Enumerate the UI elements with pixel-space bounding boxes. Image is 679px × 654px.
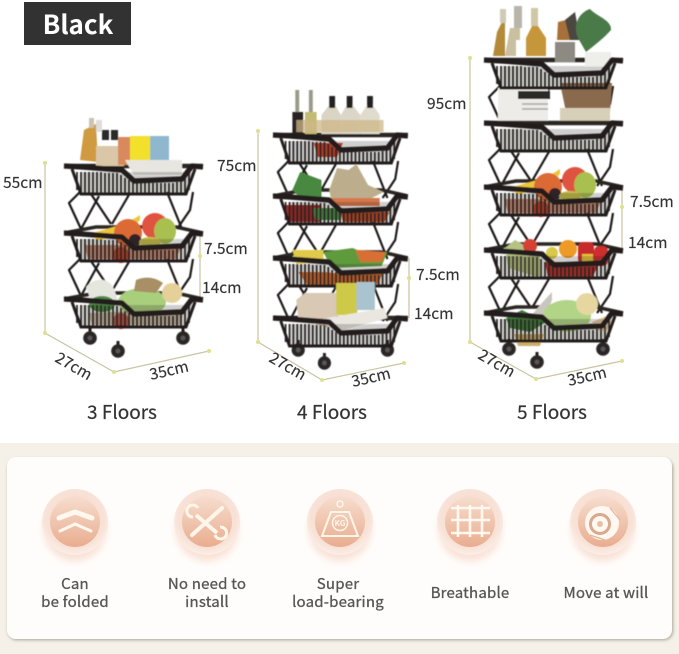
label 14cm: 14cm: [202, 276, 241, 298]
icon: wheel: [570, 489, 636, 561]
rack 5 floors: [484, 6, 623, 369]
text: no need to install: install: [185, 591, 229, 612]
shelf goods: peppers: [505, 240, 540, 278]
label 7.5cm: 7.5cm: [416, 263, 460, 285]
feature: breathable: [431, 489, 509, 603]
dimension lines 3 floors: [43, 161, 211, 374]
shelf goods: magazine and box: [498, 88, 548, 125]
label 35cm: 35cm: [147, 355, 191, 385]
label 27cm: 27cm: [52, 346, 97, 385]
label 27cm: 27cm: [266, 346, 311, 385]
caption 5 floors: 5 Floors: [517, 398, 587, 425]
label 35cm: 35cm: [349, 362, 393, 392]
label 27cm: 27cm: [474, 343, 520, 382]
label 55cm: 55cm: [3, 171, 42, 193]
rack 3 floors: [64, 118, 203, 358]
text: breathable: Breathable: [431, 582, 509, 603]
colour badge: Black: Black: [43, 5, 114, 42]
caption 3 floors: 3 Floors: [87, 398, 157, 425]
icon: crossed tools: [174, 489, 240, 561]
text: no need to install: No need to: [168, 573, 246, 594]
label 7.5cm: 7.5cm: [630, 190, 674, 212]
dimension lines 4 floors: [256, 129, 411, 382]
features band background: [0, 443, 679, 654]
cart: 4 floors: [217, 90, 460, 425]
icon: KG weight: KG: [334, 518, 346, 529]
text: move at will: Move at will: [564, 582, 648, 603]
label 75cm: 75cm: [217, 154, 256, 176]
panel: features card: [7, 457, 673, 640]
feature: can be folded: [41, 489, 109, 612]
label 35cm: 35cm: [565, 361, 609, 391]
cart: 5 floors: [427, 6, 674, 425]
feature: move at will: [564, 489, 648, 603]
cart: 3 floors: [3, 118, 248, 425]
colour badge: Black: [24, 2, 131, 45]
label 14cm: 14cm: [628, 231, 667, 253]
label 95cm: 95cm: [427, 92, 466, 114]
text: super load-bearing: Super: [317, 573, 359, 594]
icon: folding chevrons: [42, 489, 108, 561]
text: can be folded: be folded: [41, 591, 109, 612]
caption 4 floors: 4 Floors: [297, 398, 367, 425]
text: super load-bearing: load-bearing: [292, 591, 384, 612]
icon: grid: [437, 489, 503, 561]
label 14cm: 14cm: [414, 302, 453, 324]
dimension lines 5 floors: [468, 56, 624, 381]
rack 4 floors: [273, 90, 408, 370]
feature: super load-bearing: [292, 489, 384, 612]
feature: no need to install: [168, 489, 246, 612]
label 7.5cm: 7.5cm: [204, 237, 248, 259]
text: can be folded: Can: [61, 573, 89, 594]
shelf goods: bottom vegetables: [531, 292, 552, 316]
